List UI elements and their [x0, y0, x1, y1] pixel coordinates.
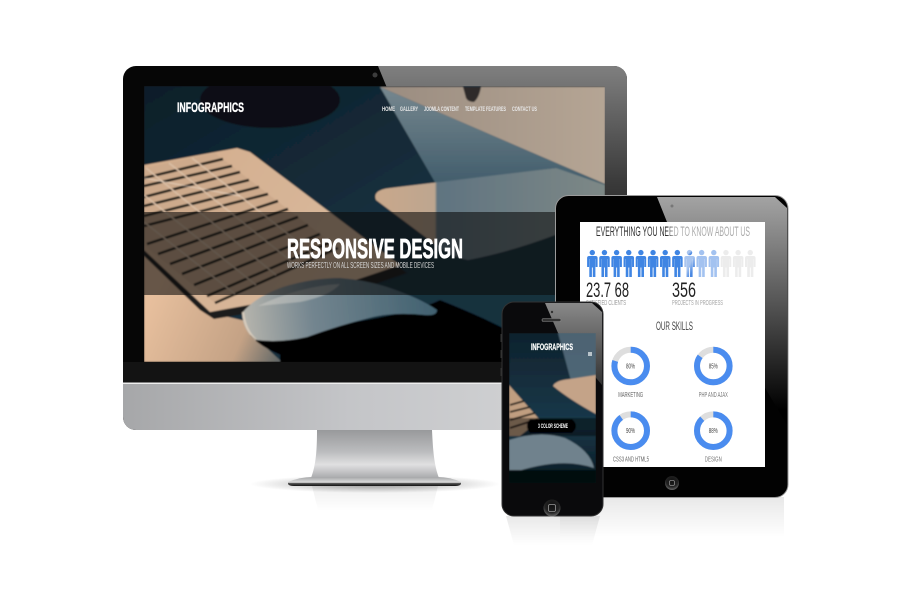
desktop monitor	[123, 66, 627, 510]
phone banner text: 3 COLOR SCHEME	[538, 424, 568, 430]
phone body	[500, 302, 603, 545]
navigation menu	[382, 106, 537, 111]
stat: projects in progress	[672, 279, 723, 307]
donut: css3 and html5 90%	[613, 414, 649, 464]
navigation menu: TEMPLATE FEATURES	[465, 107, 506, 113]
donut: design 88%: 88%	[709, 428, 718, 435]
stat: satisfied clients	[586, 279, 629, 307]
donut: css3 and html5 90%: 90%	[626, 428, 635, 435]
donut: css3 and html5 90%: CSS3 AND HTML5	[613, 456, 649, 464]
navigation menu: JOOMLA CONTENT	[424, 107, 459, 113]
stat: projects in progress: 356	[672, 279, 696, 302]
phone logo: INFOGRAPHICS	[531, 342, 573, 352]
donut: marketing 80%	[614, 350, 647, 399]
stat: satisfied clients: SATISFIED CLIENTS	[586, 300, 626, 307]
donut: marketing 80%: MARKETING	[618, 392, 643, 399]
tablet home button	[665, 476, 679, 490]
stat: projects in progress: PROJECTS IN PROGRESS	[672, 300, 723, 307]
stat: satisfied clients: 23.7 68	[586, 279, 629, 302]
donut: php and ajax 85%: PHP AND AJAX	[699, 392, 728, 399]
tablet screen	[580, 222, 765, 467]
smartphone	[500, 302, 603, 545]
monitor screen: keyboard and mouse photo	[144, 72, 605, 362]
donut: design 88%	[697, 414, 730, 464]
donut: marketing 80%: 80%	[626, 364, 635, 370]
donut: design 88%: DESIGN	[705, 456, 722, 464]
people icon chart	[587, 250, 756, 277]
phone home button	[544, 500, 560, 516]
responsive devices mockup	[123, 66, 788, 536]
logo: INFOGRAPHICS	[177, 99, 244, 115]
headline: RESPONSIVE DESIGN	[287, 233, 463, 264]
subheadline: WORKS PERFECTLY ON ALL SCREEN SIZES AND MOBILE DEVICES	[287, 261, 434, 270]
skills heading: OUR SKILLS	[656, 319, 693, 333]
monitor stand	[250, 430, 500, 510]
navigation menu: HOME	[382, 107, 395, 113]
phone screen	[509, 333, 596, 483]
tablet: EVERYTHING YOU NEED TO KNOW ABOUT US	[596, 223, 750, 239]
dark banner	[144, 212, 555, 295]
phone menu icon	[588, 352, 592, 356]
tablet	[556, 196, 788, 537]
tablet body	[556, 196, 788, 537]
navigation menu: CONTACT US	[512, 107, 537, 113]
donut: php and ajax 85%: 85%	[709, 364, 718, 370]
donut: php and ajax 85%	[697, 350, 730, 399]
monitor body	[123, 66, 627, 430]
navigation menu: GALLERY	[400, 107, 418, 113]
